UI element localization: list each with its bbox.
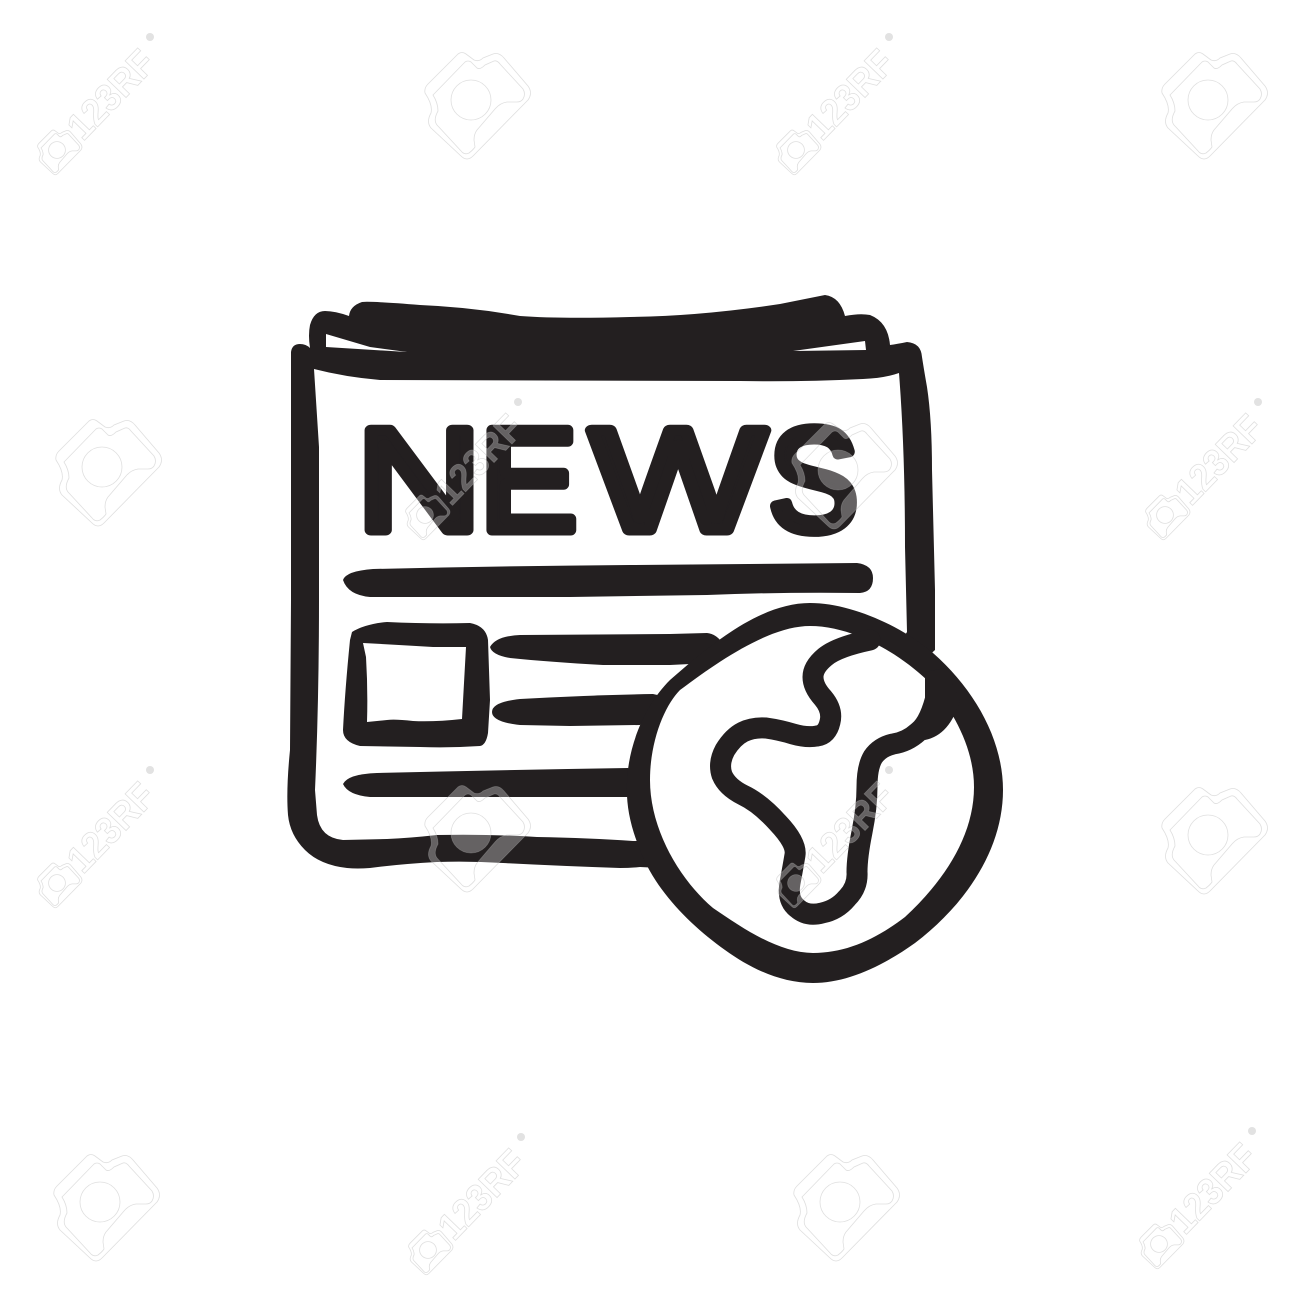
headline: NEWS: W: [591, 399, 765, 561]
photo box: [343, 622, 490, 747]
headline: NEWS: S: [769, 399, 858, 561]
watermark row 3: 123RF: [798, 775, 903, 881]
watermark row 2: 123RF: [427, 407, 532, 513]
watermark row 1: [38, 33, 1268, 175]
text line 2: [492, 694, 680, 726]
watermark row 2: 123RF: [1167, 407, 1272, 513]
watermark row 3: [38, 766, 1268, 908]
watermark row 4: 123RF: [430, 1142, 535, 1248]
headline: NEWS: N: [357, 399, 481, 561]
icon: newspaper with globe: [287, 295, 1003, 983]
headline rule: [343, 563, 873, 597]
newspaper sheets and frame: [287, 295, 935, 870]
headline: NEWS: E: [480, 399, 577, 561]
text line 3: [343, 768, 650, 797]
watermark row 1: 123RF: [798, 42, 903, 148]
icon: globe: [627, 603, 1003, 983]
watermark row 4: [54, 1127, 1266, 1275]
watermark row 4: 123RF: [1161, 1136, 1266, 1242]
watermark row 3: 123RF: [59, 775, 164, 881]
text line 1: [490, 633, 720, 665]
watermark row 2: [56, 398, 1272, 540]
watermark row 1: 123RF: [59, 42, 164, 148]
